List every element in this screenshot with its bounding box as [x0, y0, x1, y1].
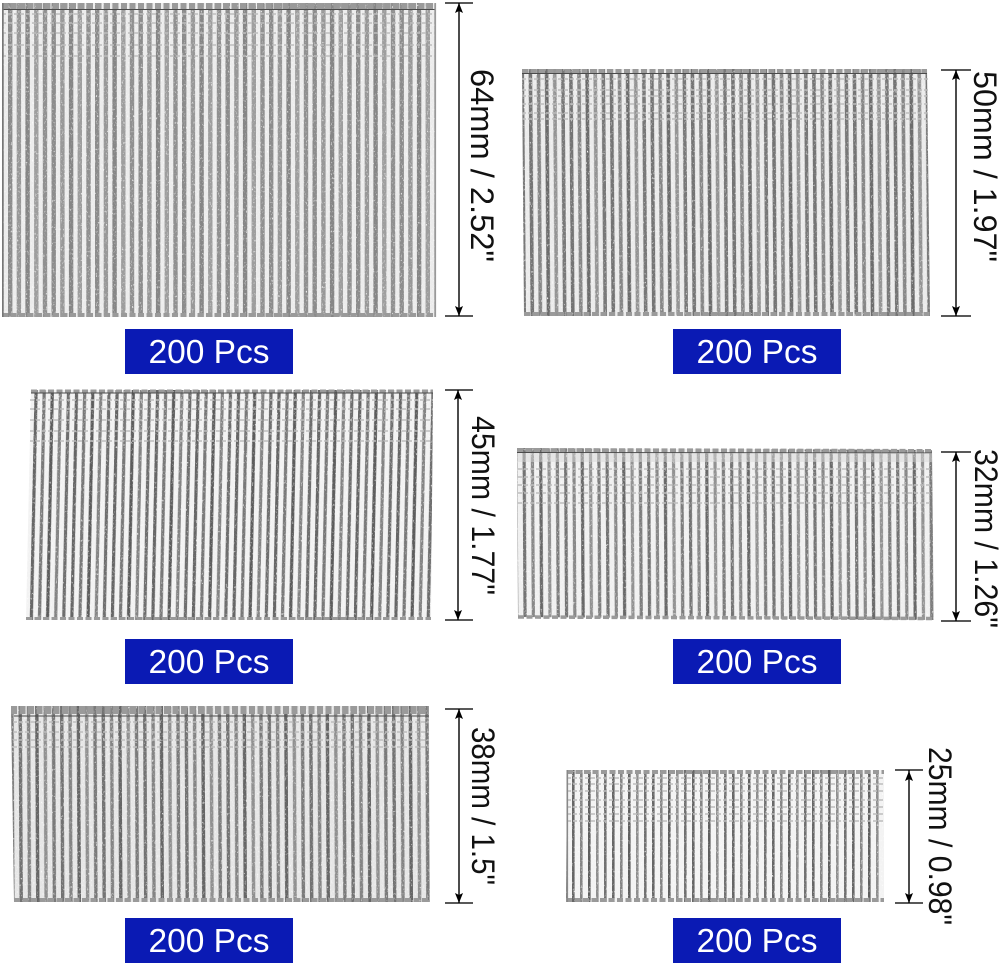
panel: 25mm nail strip	[562, 747, 958, 963]
nail strip 32mm	[514, 445, 938, 623]
nail strip 38mm	[8, 703, 434, 905]
dimension label 25mm: 25mm / 0.98"	[922, 747, 958, 925]
quantity badge	[673, 329, 841, 374]
panel: 64mm nail strip	[0, 0, 500, 374]
quantity badge	[125, 918, 293, 963]
quantity badge: 200 Pcs	[148, 334, 270, 371]
quantity badge	[673, 918, 841, 963]
panel: 50mm nail strip	[518, 66, 1000, 374]
dimension label 45mm: 45mm / 1.77"	[465, 416, 501, 595]
dimension arrow 50mm	[941, 70, 971, 316]
nail strip 25mm	[562, 767, 888, 905]
quantity badge: 200 Pcs	[148, 644, 270, 681]
dimension arrow 38mm	[445, 709, 473, 903]
dimension arrow 45mm	[445, 390, 473, 620]
panel: 45mm nail strip	[22, 386, 501, 684]
nail strip 64mm	[0, 0, 440, 320]
quantity badge: 200 Pcs	[148, 923, 270, 960]
panel: 32mm nail strip	[514, 445, 1000, 684]
quantity badge	[125, 329, 293, 374]
dimension arrow 32mm	[941, 452, 971, 621]
dimension arrow 64mm	[445, 3, 473, 316]
dimension arrow 25mm	[895, 770, 923, 903]
dimension label 64mm: 64mm / 2.52"	[464, 69, 500, 262]
quantity badge: 200 Pcs	[696, 334, 818, 371]
nail strip 45mm	[22, 386, 438, 624]
nail strip 50mm	[518, 66, 934, 320]
quantity badge	[125, 639, 293, 684]
dimension label 38mm: 38mm / 1.5"	[465, 727, 501, 885]
quantity badge: 200 Pcs	[696, 923, 818, 960]
panel: 38mm nail strip	[8, 703, 501, 963]
quantity badge	[673, 639, 841, 684]
quantity badge: 200 Pcs	[696, 644, 818, 681]
